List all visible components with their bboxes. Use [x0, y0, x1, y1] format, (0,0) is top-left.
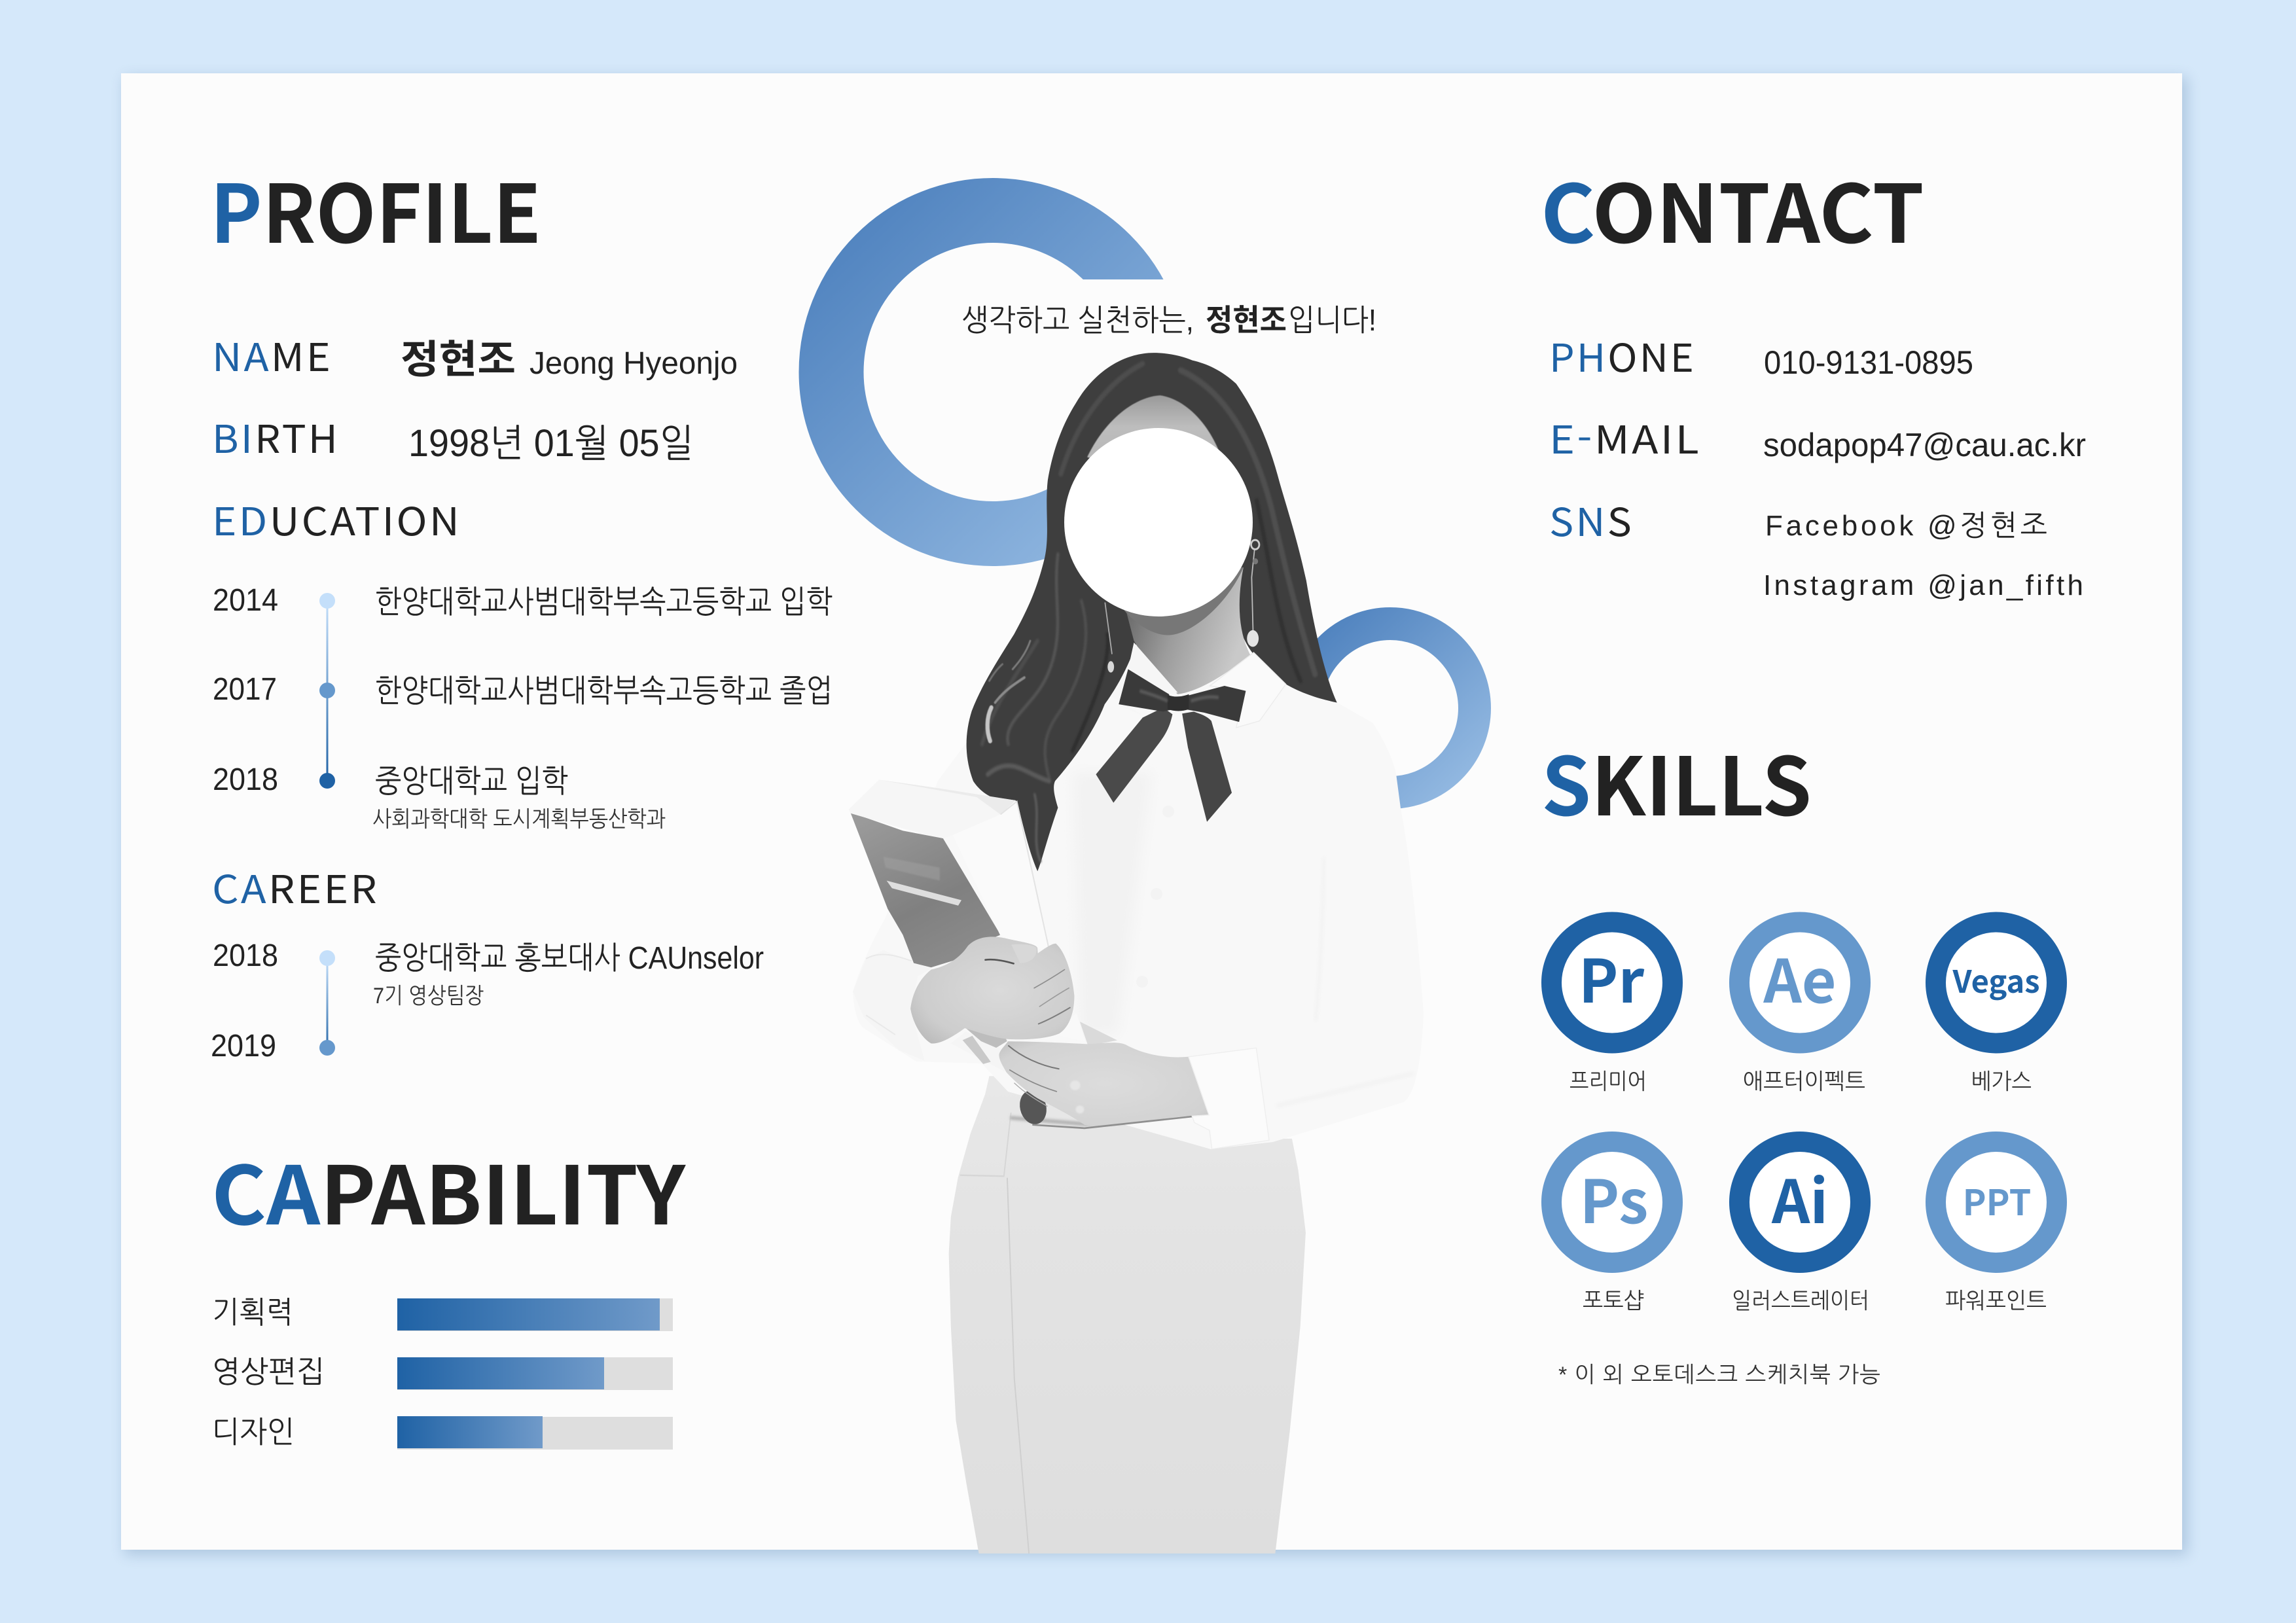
shirt shading — [1073, 772, 1414, 1106]
hair — [967, 353, 1337, 871]
icon: illustrator: Ai — [1771, 1154, 1828, 1241]
decorative ring: large — [831, 211, 1155, 534]
icon: after effects — [1740, 922, 1860, 1043]
skirt — [949, 1076, 1306, 1554]
forearm behind hand — [966, 1028, 1007, 1048]
facebook value: Facebook @정현조 — [1765, 510, 2047, 542]
label: powerpoint: 파워포인트 — [1945, 1289, 2047, 1313]
dot 2017 — [319, 683, 335, 698]
label: name: NAME — [212, 327, 332, 382]
forehead — [1087, 395, 1220, 474]
panel: profile — [210, 150, 833, 1063]
shirt — [853, 654, 1424, 1149]
dot 2014 — [319, 593, 335, 609]
year 2018: 2018 — [213, 938, 278, 973]
label: planning: 기획력 — [212, 1295, 293, 1329]
book — [849, 779, 1085, 1071]
tagline: 생각하고 실천하는, — [961, 303, 1194, 337]
tagline: 정현조 — [1206, 296, 1287, 340]
book cover — [850, 812, 1001, 967]
upper hand — [910, 936, 1074, 1044]
label: vegas: 베가스 — [1971, 1069, 2032, 1094]
chin — [1119, 567, 1244, 635]
bar: video editing — [397, 1357, 673, 1390]
birth value: 1998년 01월 05일 — [408, 422, 694, 465]
label: sns: SNS — [1549, 491, 1634, 547]
entry 2014: 한양대학교사범대학부속고등학교 입학 — [375, 585, 833, 620]
label: video editing: 영상편집 — [212, 1355, 325, 1389]
entry career detail: 7기 영상팀장 — [373, 984, 484, 1008]
heading: contact: CONTACT — [1541, 150, 1924, 266]
lower hand — [999, 1022, 1210, 1128]
name in latin: Jeong Hyeonjo — [529, 346, 738, 381]
year 2018: 2018 — [213, 762, 278, 797]
right sleeve cuff — [1189, 1048, 1269, 1149]
panel: contact — [1541, 150, 2086, 601]
icon: premiere — [1551, 922, 1673, 1043]
icon: photoshop — [1551, 1141, 1673, 1263]
education timeline — [213, 583, 833, 832]
left sleeve cuff — [853, 950, 931, 1061]
panel: capability — [211, 1132, 687, 1450]
decorative ring: small — [1306, 624, 1475, 793]
label: after effects: 애프터이펙트 — [1743, 1069, 1865, 1094]
timeline line — [326, 958, 329, 1048]
label: design: 디자인 — [212, 1415, 295, 1449]
bow — [1096, 669, 1246, 822]
label: premiere: 프리미어 — [1570, 1069, 1647, 1094]
label: career: CAREER — [212, 859, 379, 914]
dot 2018 — [319, 950, 335, 966]
phone value: 010-9131-0895 — [1764, 344, 1973, 381]
icon: vegas — [1936, 922, 2056, 1043]
label: illustrator: 일러스트레이터 — [1732, 1289, 1869, 1313]
bar: planning — [397, 1298, 673, 1331]
label: photoshop: 포토샵 — [1583, 1289, 1644, 1313]
label: birth: BIRTH — [212, 408, 340, 464]
icon: illustrator — [1740, 1141, 1860, 1263]
label: phone: PHONE — [1549, 327, 1696, 383]
label: email: E-MAIL — [1549, 409, 1701, 465]
label: education: EDUCATION — [212, 491, 461, 546]
book top edge — [849, 779, 1016, 838]
icon: powerpoint: PPT — [1963, 1174, 2031, 1226]
career timeline — [211, 938, 764, 1063]
dot 2019 — [319, 1040, 335, 1056]
dot 2018 — [319, 773, 335, 789]
name value: 정현조 — [401, 328, 516, 385]
heading: profile: PROFILE — [210, 150, 541, 266]
tagline backing strip — [942, 279, 1401, 368]
left earring — [1105, 603, 1114, 673]
belt button — [1016, 1088, 1050, 1126]
entry 2018 detail: 사회과학대학 도시계획부동산학과 — [372, 807, 666, 832]
bar: design — [397, 1416, 673, 1450]
book label — [887, 881, 961, 906]
tagline: 입니다! — [1288, 303, 1376, 337]
year 2014: 2014 — [213, 583, 278, 618]
figure: woman holding a book — [849, 353, 1424, 1554]
entry 2018: 중앙대학교 입학 — [375, 764, 568, 799]
icon: photoshop: Ps — [1580, 1154, 1648, 1241]
timeline line — [326, 601, 329, 781]
year 2017: 2017 — [213, 672, 277, 707]
neck — [1125, 567, 1251, 694]
book bottom corner — [950, 1031, 1009, 1071]
collar — [1111, 643, 1177, 716]
year 2019: 2019 — [211, 1029, 276, 1063]
heading: capability: CAPABILITY — [211, 1132, 687, 1248]
book pages — [953, 800, 1049, 954]
entry 2017: 한양대학교사범대학부속고등학교 졸업 — [375, 674, 833, 709]
panel: skills — [1541, 722, 2056, 1387]
footnote: * 이 외 오토데스크 스케치북 가능 — [1558, 1363, 1880, 1387]
icon: vegas: Vegas — [1952, 957, 2040, 1002]
right earring — [1247, 540, 1259, 647]
tagline — [961, 296, 1376, 340]
icon: powerpoint — [1936, 1141, 2056, 1263]
entry career: 중앙대학교 홍보대사 CAUnselor — [375, 941, 764, 976]
face mask — [1064, 428, 1253, 616]
email value: sodapop47@cau.ac.kr — [1763, 427, 2086, 463]
heading: skills: SKILLS — [1541, 722, 1812, 839]
icon: after effects: Ae — [1763, 934, 1837, 1020]
icon: premiere: Pr — [1579, 934, 1645, 1020]
instagram value: Instagram @jan_fifth — [1763, 569, 2083, 601]
